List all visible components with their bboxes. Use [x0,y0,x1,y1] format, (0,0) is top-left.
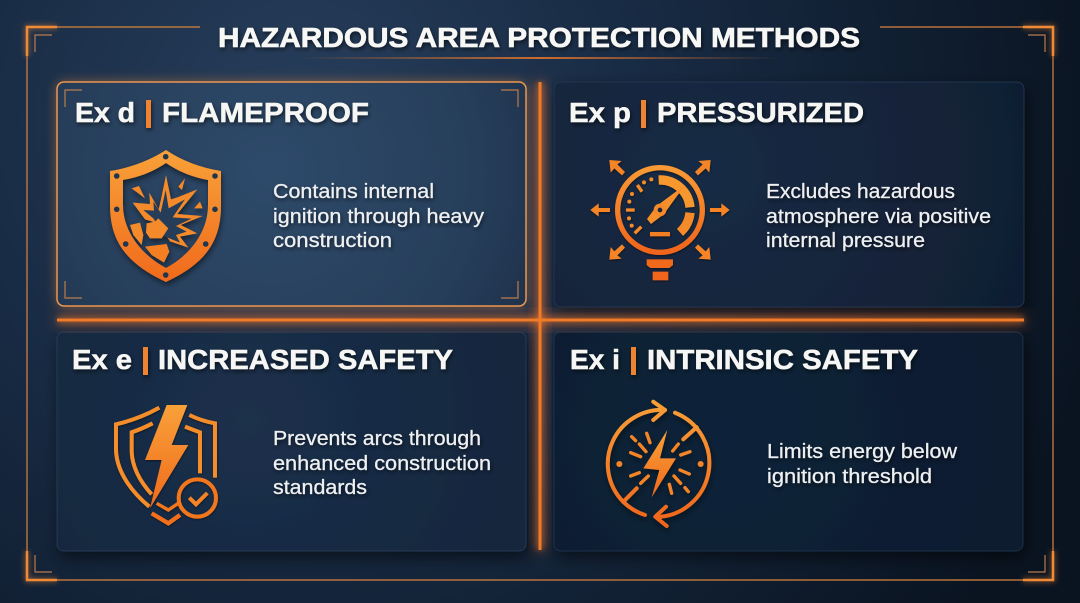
description: Ex p [766,181,991,252]
description: Ex e [273,428,491,499]
description: Ex p: internal pressure [766,230,925,252]
description: Ex d: construction [273,230,392,252]
heading: Ex e: INCREASED SAFETY [158,344,453,375]
icon: shield with lightning bolt and check [116,405,216,523]
panel: Ex d flameproof [57,82,526,306]
panel: Ex i intrinsic safety [554,332,1023,551]
heading: Ex e: Ex e [72,344,132,375]
description: Ex i: ignition threshold [767,466,932,488]
description: Ex i [767,441,958,488]
heading: Ex p: Ex p [569,97,631,128]
description: Ex d: ignition through heavy [273,206,484,228]
description: Ex e: Prevents arcs through [273,428,481,450]
description: Ex p: atmosphere via positive [766,206,991,228]
title underline [300,57,780,59]
icon: energy cycle with bolt [608,402,709,526]
heading: Ex p [569,97,864,128]
heading: Ex i: Ex i [570,344,620,375]
description: Ex d: Contains internal [273,181,434,203]
panel: Ex e increased safety [57,332,526,551]
icon: pressure gauge with arrows [590,160,730,280]
heading: Ex d [75,97,369,128]
panel: Ex p pressurized [554,82,1024,307]
description: Ex i: Limits energy below [767,441,958,463]
description: Ex p: Excludes hazardous [766,181,955,203]
heading: Ex d: FLAMEPROOF [162,97,369,128]
heading: Ex i: INTRINSIC SAFETY [647,344,918,375]
description: Ex d [273,181,484,252]
cross dividers [57,82,1024,550]
title: HAZARDOUS AREA PROTECTION METHODS [218,22,860,53]
icon: shield with explosion [110,150,221,282]
description: Ex e: enhanced construction [273,453,491,475]
description: Ex e: standards [273,477,367,499]
heading: Ex p: PRESSURIZED [657,97,864,128]
heading: Ex d: Ex d [75,97,135,128]
